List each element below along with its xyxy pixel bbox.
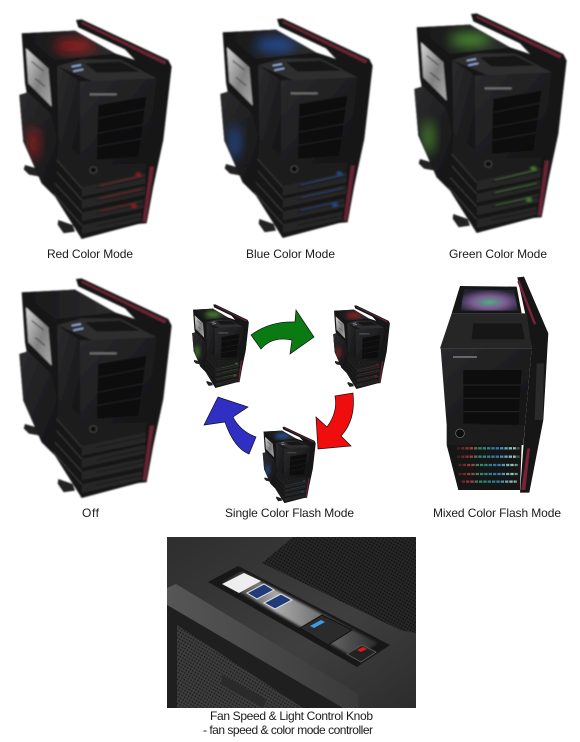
small case: green (192, 304, 249, 388)
caption: green color mode: Green Color Mode (449, 247, 547, 261)
window colours (461, 289, 518, 311)
esata port label (222, 573, 261, 593)
side recess (221, 675, 267, 708)
caption: control knob title: Fan Speed & Light Control Knob (210, 709, 373, 723)
top mesh vent (262, 537, 416, 633)
photo: blue color mode case (220, 18, 373, 238)
caption: mixed color flash mode: Mixed Color Flash Mode (433, 506, 561, 520)
spine (517, 277, 548, 493)
photo: case with lights off (19, 278, 172, 498)
usb port 1 (247, 584, 274, 599)
front ports (535, 363, 544, 420)
logo (453, 354, 477, 360)
bay stack (447, 445, 522, 490)
caption: single color flash mode: Single Color Flash Mode (225, 506, 354, 520)
control plate (208, 566, 390, 667)
front edge band (167, 584, 358, 708)
metal strip (222, 572, 378, 658)
spine red stripes (517, 280, 536, 490)
photo: red color mode case (19, 19, 172, 239)
drive bays (463, 370, 522, 425)
bay lines (463, 385, 521, 412)
small case: red (333, 305, 390, 389)
top vent (472, 323, 525, 339)
rainbow lights (457, 448, 520, 482)
caption: red color mode: Red Color Mode (47, 247, 133, 261)
button red light (357, 647, 367, 652)
front face (441, 348, 532, 425)
arrow: red to blue (316, 393, 354, 449)
top surface (167, 537, 416, 708)
photo: mixed color flash mode case (440, 277, 548, 493)
side mesh (177, 625, 303, 708)
power strip (447, 425, 525, 445)
arrow: blue to green (204, 397, 256, 454)
usb port 2 (264, 594, 292, 609)
photo: green color mode case (414, 13, 567, 233)
lit top window (452, 286, 522, 313)
fan knob (300, 615, 352, 645)
knob (456, 429, 464, 438)
diagram: single color flash cycle (192, 304, 390, 503)
caption: control knob description: - fan speed & color mode controller (203, 723, 373, 737)
caption: off: Off (82, 506, 100, 520)
case body (440, 313, 532, 348)
arrow: green to red (251, 310, 314, 354)
small case: blue (263, 427, 316, 503)
knob blue light (310, 620, 325, 628)
photo: control panel close-up (167, 537, 416, 708)
led button (347, 645, 376, 662)
side face (167, 605, 343, 708)
caption: blue color mode: Blue Color Mode (246, 247, 335, 261)
